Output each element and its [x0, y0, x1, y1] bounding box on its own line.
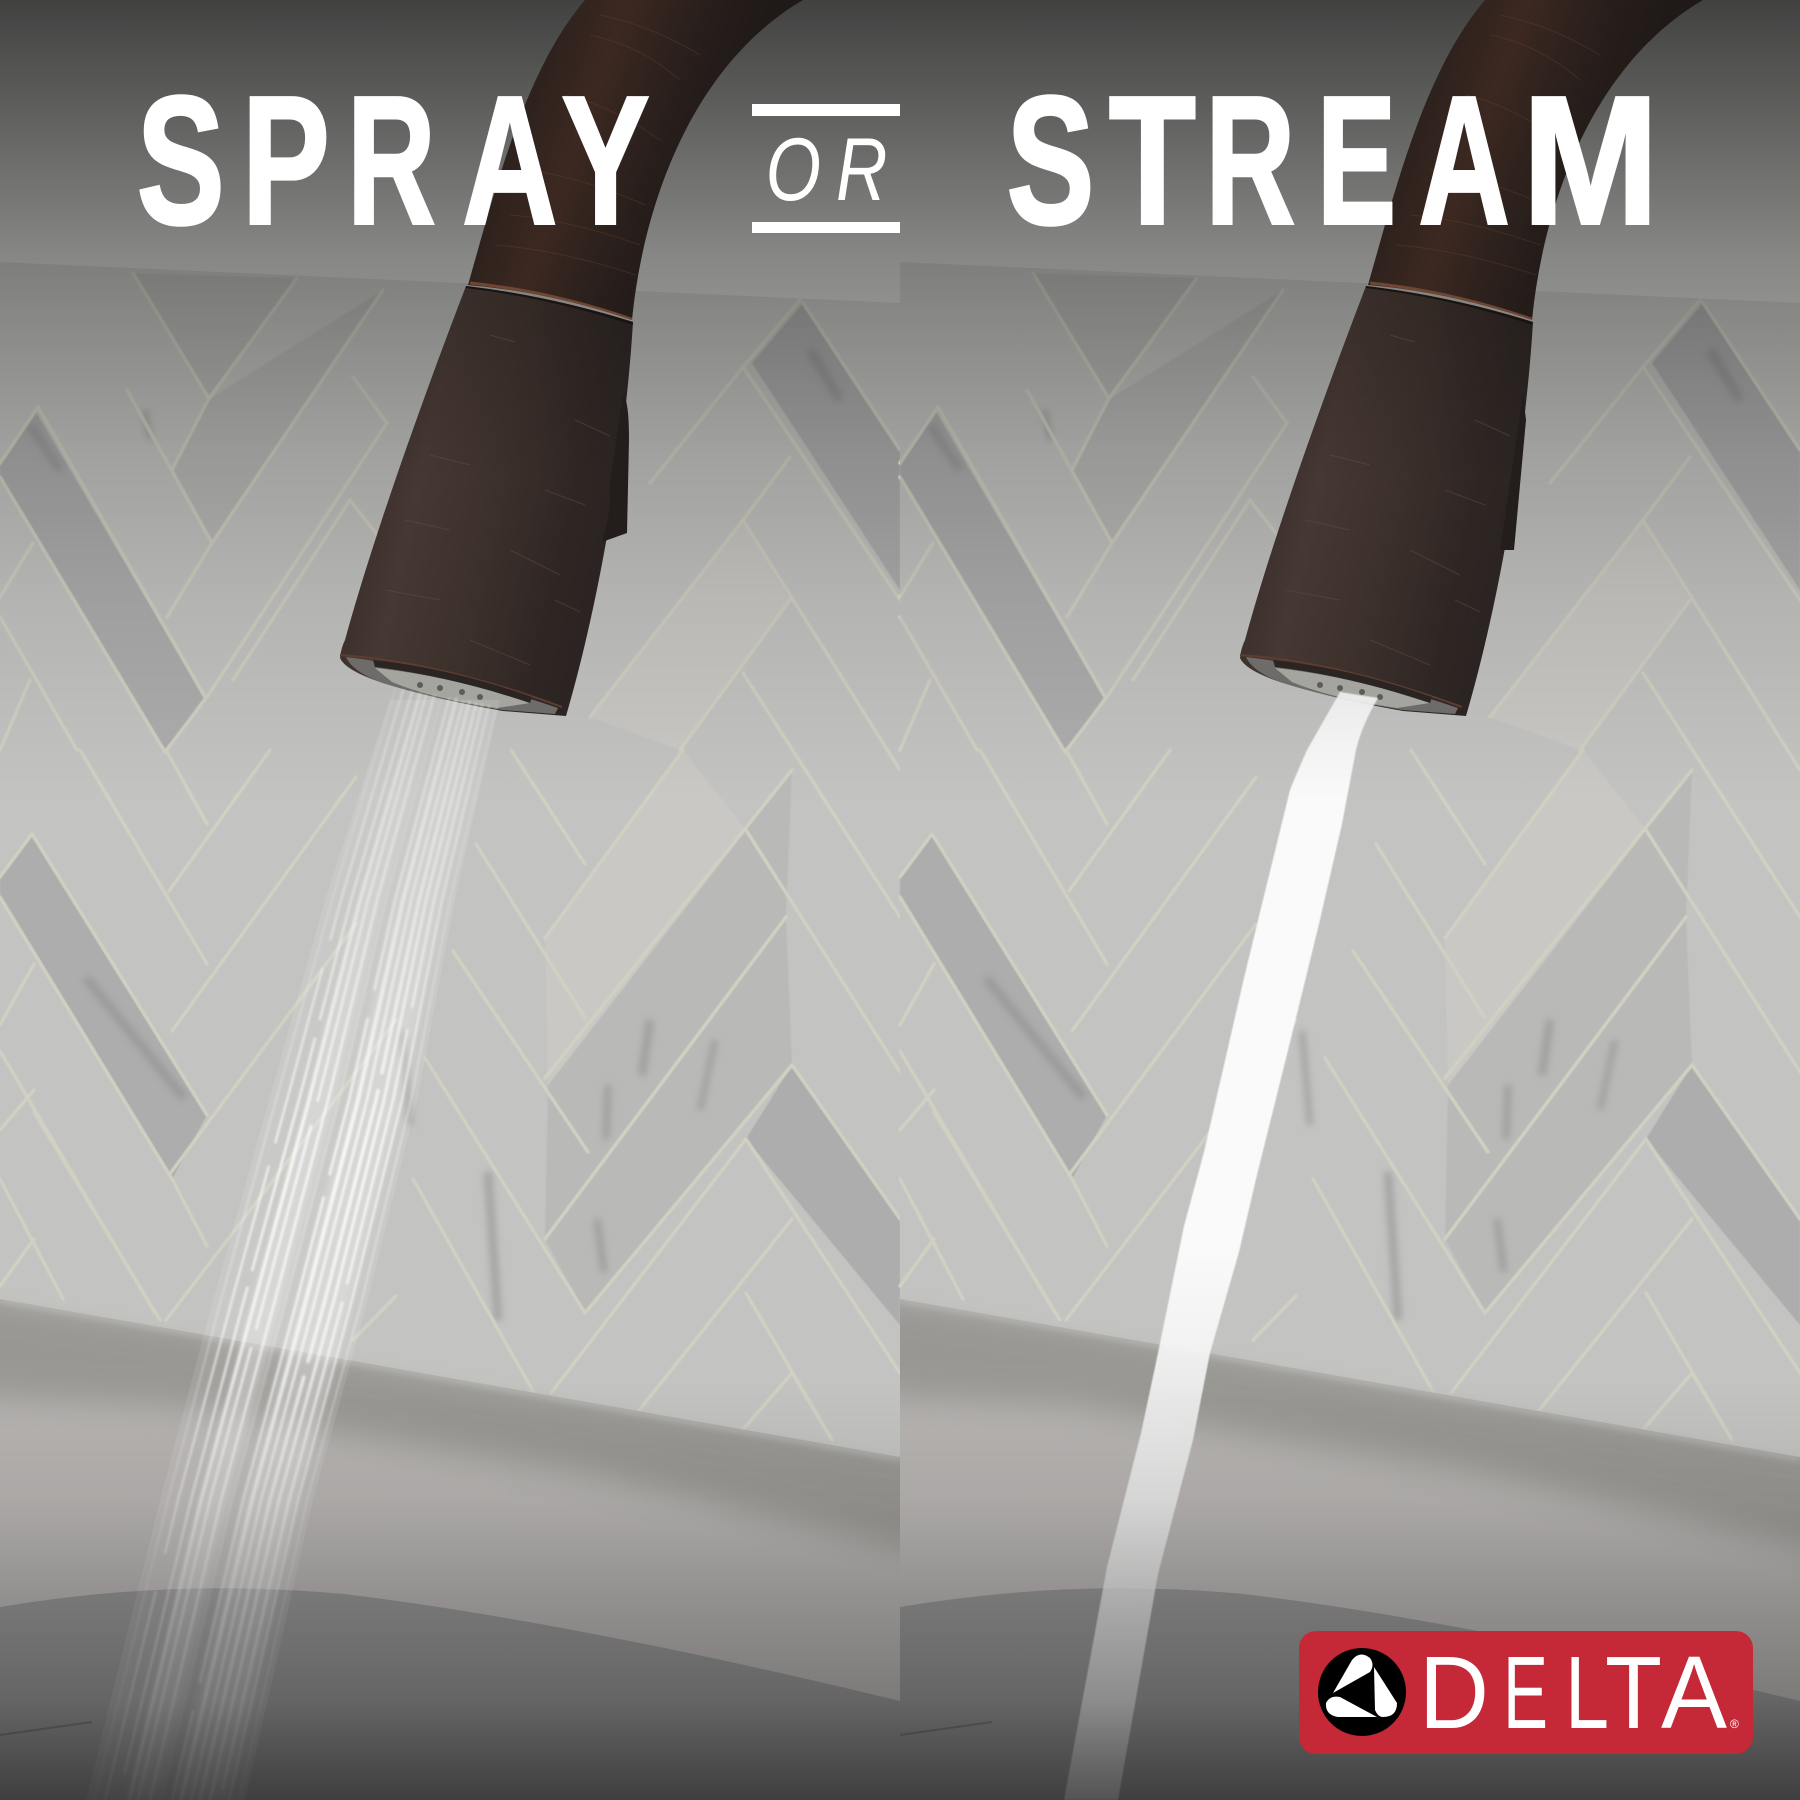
spray water streams — [86, 690, 500, 1800]
registered mark: ® — [1730, 1717, 1739, 1731]
bottom shading over photo — [0, 1380, 1800, 1800]
logo: Delta — [1299, 1631, 1753, 1754]
icon: faucet trigger button — [602, 395, 629, 542]
faucet nozzle — [340, 655, 562, 714]
wordmark: DELTA: L — [1565, 1635, 1609, 1750]
heading: OR with rules — [752, 104, 900, 233]
heading: SPRAY: Y — [562, 58, 649, 263]
heading: STREAM: E — [1317, 58, 1396, 263]
heading: SPRAY: R — [347, 58, 436, 263]
heading: SPRAY: A — [462, 58, 557, 263]
heading: SPRAY: S — [137, 58, 225, 263]
icon: Delta triangle mark — [1318, 1648, 1406, 1736]
heading: OR with rules: OR — [766, 120, 887, 220]
panel background: marble herringbone wall, counter and spout — [840, 0, 1800, 1800]
panel: stream (right) — [840, 0, 1800, 1800]
wordmark: DELTA: T — [1605, 1635, 1662, 1750]
heading: STREAM: S — [1007, 58, 1094, 263]
icon: faucet trigger button — [1500, 394, 1526, 550]
faucet nozzle — [1240, 655, 1462, 714]
panel: spray (left) — [0, 0, 960, 1800]
heading: STREAM: M — [1522, 58, 1659, 263]
wordmark: DELTA: E — [1503, 1635, 1548, 1750]
wordmark: DELTA: D — [1419, 1635, 1489, 1750]
heading: STREAM: T — [1109, 58, 1196, 263]
solid stream of water — [1064, 692, 1378, 1800]
panel background: marble herringbone wall, counter and spout — [0, 0, 960, 1800]
heading: STREAM: A — [1418, 58, 1510, 263]
heading: SPRAY: P — [242, 58, 330, 263]
heading: STREAM: R — [1205, 58, 1295, 263]
wordmark: DELTA: A — [1661, 1635, 1727, 1750]
